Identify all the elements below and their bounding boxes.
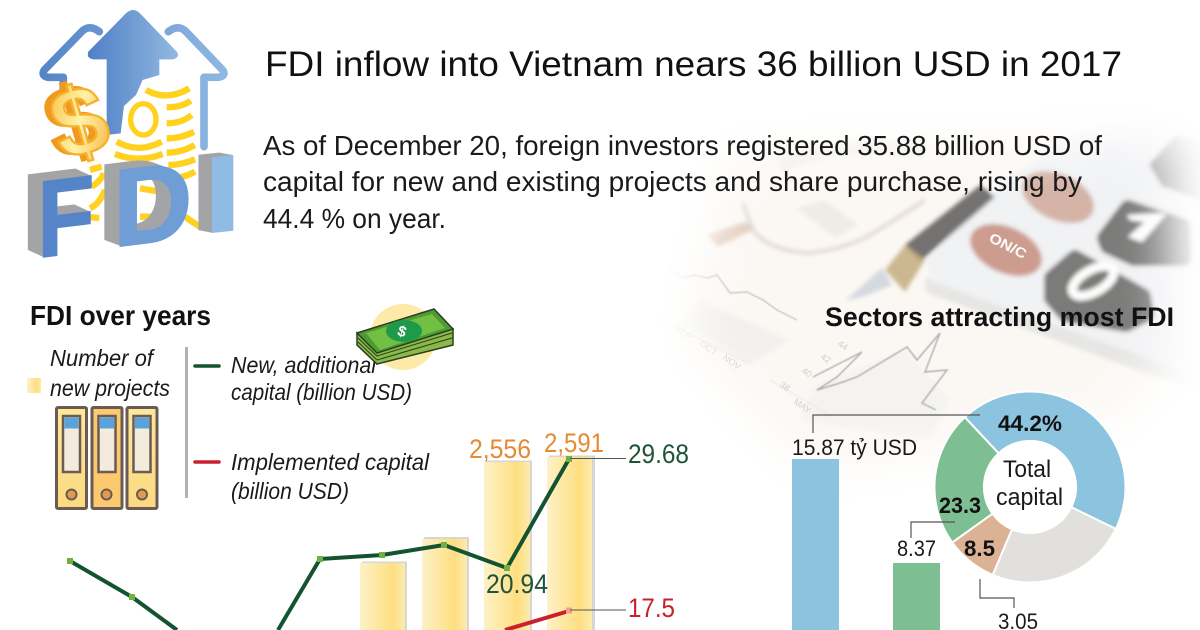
data labels: 2,591 [544,428,604,458]
background photo: calculator, pen and stock charts: MAY [792,396,813,415]
icon: dollar sign: $ [39,63,120,181]
intro paragraph: 44.4 % on year. [263,203,446,234]
legend: new, additional capital: New, additional [231,352,377,378]
icon: central arrow [88,10,178,135]
donut chart: total capital [934,391,1125,582]
legend: number of new projects [27,345,170,401]
icon: letter D: D [113,138,192,271]
title: FDI inflow into Vietnam nears 36 billion USD in 2017 [265,45,1122,84]
background photo: calculator, pen and stock charts [676,136,1198,446]
donut chart: total capital: 8.5 [964,536,995,561]
panel: sectors attracting most FDI [792,302,1174,630]
line chart: new, additional capital [67,456,572,630]
data labels: 20.94 [486,569,548,599]
data labels: 17.5 [628,593,675,623]
legend: implemented capital: (billion USD) [231,478,349,504]
line chart: implemented capital [505,608,572,630]
intro paragraph: capital for new and existing projects and share purchase, rising by [263,166,1082,197]
background photo: calculator, pen and stock charts: SEP [673,323,693,342]
legend: implemented capital: Implemented capital [231,449,430,475]
icon: letter I: I [202,131,243,258]
background photo: calculator, pen and stock charts: 44 [836,338,850,352]
icon: FDI logo with arrows and coins [28,10,243,282]
heading: sectors attracting most FDI: Sectors attracting most FDI [825,302,1174,332]
background photo: calculator, pen and stock charts: NOV [721,352,743,372]
legend: new, additional capital: capital (billion USD) [231,379,412,405]
bar chart: new projects [360,456,595,630]
donut chart: total capital: capital [996,484,1063,511]
bar: 8.37: 8.37 [897,536,936,561]
legend: new, additional capital [195,352,412,405]
legend: number of new projects: new projects [50,375,170,401]
background photo: calculator, pen and stock charts: 42 [819,351,833,365]
icon: dollar sign: $ [33,61,114,180]
data labels: 2,556 [469,434,531,464]
legend: number of new projects: Number of [50,345,156,371]
bar: 15.87: 15.87 tỷ USD [792,435,917,460]
legend: implemented capital [195,449,430,504]
icon: three binders [56,408,157,508]
icon: side arrows [43,28,224,147]
donut chart: total capital: 44.2% [998,411,1062,436]
icon: stack of money: $ [395,322,409,341]
background photo: calculator, pen and stock charts: 40 [800,365,814,379]
icon: stack of money [357,304,453,370]
intro paragraph: As of December 20, foreign investors registered 35.88 billion USD of [263,130,1102,161]
panel: FDI over years [27,300,689,630]
intro paragraph [263,130,1102,234]
bar: 15.87 [792,435,917,630]
data labels: 29.68 [628,439,689,469]
donut chart: total capital: Total [1003,456,1051,483]
icon: coins [90,88,200,227]
donut chart: total capital: 23.3 [939,493,981,518]
heading: FDI over years: FDI over years [30,300,211,331]
background photo: calculator, pen and stock charts: ON/C [987,229,1030,262]
data labels [469,428,689,623]
icon: letter F: F [37,152,95,282]
background photo: calculator, pen and stock charts: OCT [698,338,720,358]
background photo: calculator, pen and stock charts: 38 [778,379,792,393]
bar: 8.37 [893,536,940,630]
